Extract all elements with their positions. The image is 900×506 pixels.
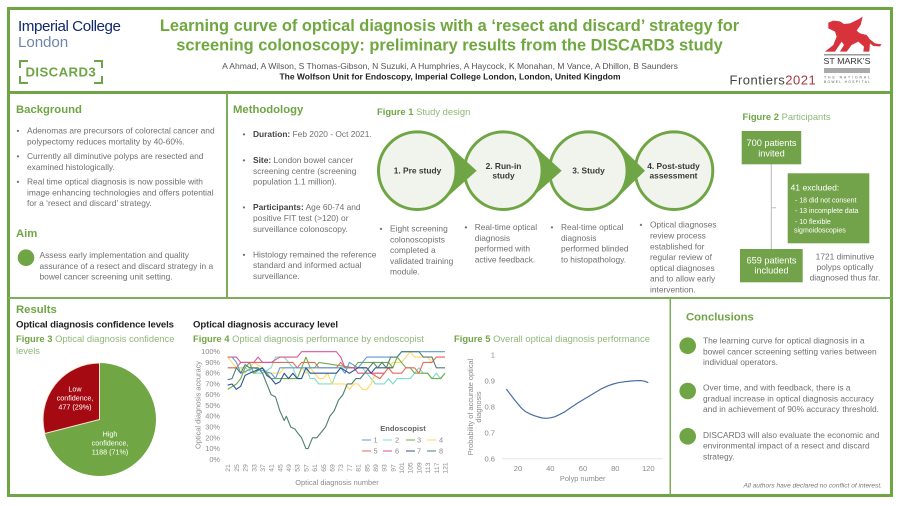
text block: step 4 notes: Optical diagnoses: [650, 220, 717, 230]
chart legend: Endoscopist: [380, 424, 426, 433]
text block: methodology bullets: Histology remained the reference: [253, 249, 377, 259]
heading: figure 2: Figure 2 Participants: [742, 111, 831, 122]
box: excluded: - 13 incomplete data: [795, 208, 859, 215]
flow diagram: four circles and arrows: 1. Pre study: [394, 166, 442, 176]
logo: Imperial College London: [18, 18, 121, 51]
heading: aim: Aim: [16, 228, 37, 240]
authors and affiliation: A Ahmad, A Wilson, S Thomas-Gibson, N Suzuki, A Humphries, A Haycock, K Monahan, M Vance, A Dhillon, B Saunders: [222, 61, 678, 71]
text block: step 2 notes: •: [464, 222, 468, 232]
line chart: 45: [277, 464, 284, 472]
flow diagram: four circles and arrows: 3. Study: [572, 166, 605, 176]
text block: step 4 notes: review process: [650, 230, 706, 240]
subheading: accuracy: Optical diagnosis accuracy level: [193, 320, 338, 330]
line chart: 49: [286, 464, 293, 472]
panel: aim: [16, 228, 213, 282]
conclusion 1: bowel cancer screening setting varies between: [703, 346, 877, 356]
box: included: 659 patients: [746, 256, 797, 266]
text block: step 3 notes: [550, 222, 629, 264]
line chart: 85: [364, 464, 371, 472]
conclusion 1: The learning curve for optical diagnosis in a: [703, 336, 865, 346]
line chart: 113: [425, 462, 432, 473]
text block: polyps diagnosed: polyps optically: [817, 262, 874, 272]
title: screening colonoscopy: preliminary results from the DISCARD3 study: [176, 36, 724, 54]
line chart: 30%: [205, 422, 220, 432]
text block: step 3 notes: performed blinded: [561, 244, 629, 254]
text block: step 4 notes: intervention.: [650, 284, 696, 294]
text block: step 3 notes: •: [550, 222, 554, 232]
chart legend: 8: [439, 446, 443, 456]
text block: step 1 notes: colonoscopists: [390, 234, 445, 244]
flow diagram: four circles and arrows: assessment: [650, 170, 698, 180]
chart legend: 3: [417, 436, 421, 444]
text block: step 1 notes: completed a: [390, 245, 436, 255]
disclaimer: All authors have declared no conflict of interest.: [742, 482, 882, 490]
line chart: 37: [260, 464, 267, 472]
line chart: 40%: [205, 412, 220, 421]
line chart: 1: [491, 350, 495, 360]
line chart: 109: [416, 462, 423, 474]
text block: background bullets: •: [16, 151, 20, 161]
line chart: 81: [356, 464, 363, 472]
line chart: 80%: [205, 369, 220, 378]
text block: background bullets: •: [16, 126, 20, 136]
panel: conclusions: [679, 312, 882, 490]
heading: figure 5: Figure 5 Overall optical diagnosis performance: [454, 333, 650, 344]
box: excluded: - 10 flexible: [795, 219, 831, 226]
line chart: 89: [373, 464, 380, 472]
text block: methodology bullets: •: [242, 129, 246, 139]
conclusion 3: strategy.: [703, 451, 734, 461]
chart legend: 7: [417, 446, 421, 456]
heading: results: Results: [16, 304, 57, 316]
text block: aim: assurance of a resect and discard strategy in a: [40, 261, 213, 271]
line chart: 70%: [205, 380, 220, 388]
line chart: 57: [303, 464, 310, 472]
text block: background bullets: •: [16, 176, 20, 186]
conclusion 2: gradual increase in optical diagnosis accuracy: [703, 393, 875, 403]
box: invited: invited: [758, 148, 785, 158]
text block: polyps diagnosed: diagnosed thus far.: [810, 272, 880, 282]
line chart: 105: [408, 462, 415, 474]
panel: background: [16, 104, 215, 208]
pie chart: confidence,: [57, 394, 93, 402]
logo: Imperial College London: Imperial College: [18, 18, 121, 35]
pie chart: confidence,: [92, 438, 128, 448]
chart legend: [362, 424, 443, 456]
conclusion 2: [679, 383, 879, 414]
connector: [771, 164, 776, 249]
text block: step 4 notes: established for: [650, 241, 705, 251]
icon: aim bullet: [18, 249, 34, 266]
chart legend: 6: [395, 446, 399, 456]
flow diagram: four circles and arrows: 2. Run-in: [486, 161, 521, 171]
authors and affiliation: [222, 61, 678, 82]
text block: step 3 notes: to histopathology.: [561, 254, 626, 264]
text block: methodology bullets: •: [242, 202, 246, 212]
box: invited: 700 patients: [746, 138, 797, 148]
text block: methodology bullets: surveillance.: [253, 271, 300, 281]
line chart: 25: [234, 464, 241, 472]
authors and affiliation: The Wolfson Unit for Endoscopy, Imperial College London, London, United Kingdom: [279, 72, 621, 82]
heading: figure 3: levels: [16, 345, 40, 356]
line chart: 50%: [205, 401, 220, 410]
line chart: 60: [579, 464, 587, 473]
text block: step 4 notes: •: [640, 220, 642, 230]
figure 3: confidence pie: [16, 333, 174, 476]
line chart: 0.7: [484, 428, 495, 438]
box: excluded: sigmoidoscopies: [794, 227, 846, 234]
heading: methodology: Methodology: [233, 104, 304, 116]
title: Learning curve of optical diagnosis with a ‘resect and discard’ strategy for: [160, 17, 740, 35]
pie chart: Low: [68, 384, 82, 394]
text block: step 1 notes: validated training: [390, 256, 454, 266]
text block: background bullets: for a ‘resect and discard’ strategy.: [27, 198, 152, 208]
logo: DISCARD3: [20, 61, 102, 83]
conclusion 1: [679, 336, 877, 367]
text block: methodology bullets: Site: London bowel cancer: [253, 155, 353, 165]
line chart: 40: [546, 464, 555, 473]
heading: background: Background: [16, 104, 82, 116]
conclusion 3: [679, 428, 880, 461]
box: included: included: [754, 266, 789, 276]
line chart: 90%: [205, 358, 220, 367]
line chart: 53: [295, 464, 302, 472]
line chart: Polyp number: [560, 474, 606, 483]
heading: figure 1: Figure 1 Study design: [377, 106, 470, 117]
line chart: 69: [330, 464, 336, 472]
text block: step 4 notes: regular review of: [650, 252, 713, 262]
line chart: 93: [382, 464, 389, 472]
text block: step 1 notes: Eight screening: [390, 224, 448, 234]
line chart: [466, 350, 663, 483]
text block: background bullets: Real time optical diagnosis is now possible with: [27, 176, 203, 186]
text block: step 3 notes: diagnosis: [561, 233, 596, 243]
text block: methodology bullets: population 1.1 million).: [253, 176, 337, 186]
line chart: Optical diagnosis accuracy: [194, 361, 202, 449]
line chart: [194, 347, 450, 487]
text block: step 4 notes: [640, 220, 717, 294]
line chart: 29: [243, 464, 250, 472]
line chart: 73: [338, 464, 345, 472]
pie chart: [43, 363, 156, 476]
text block: background bullets: [16, 126, 215, 208]
text block: background bullets: Adenomas are precursors of colorectal cancer and: [27, 126, 215, 136]
chart legend: 4: [439, 436, 443, 444]
logo: St Mark's winged lion: [824, 17, 882, 84]
flow diagram: four circles and arrows: study: [492, 170, 515, 180]
text block: polyps diagnosed: 1721 diminutive: [816, 252, 875, 262]
line chart: 41: [269, 464, 276, 472]
line chart: Optical diagnosis number: [295, 478, 379, 487]
line chart: 10%: [205, 444, 220, 453]
flow diagram: four circles and arrows: [378, 132, 713, 210]
text block: step 2 notes: Real-time optical: [475, 222, 537, 232]
line chart: 65: [321, 464, 328, 472]
logo: DISCARD3: DISCARD3: [26, 64, 96, 80]
line chart: 21: [225, 464, 232, 472]
text block: methodology bullets: surveillance colonoscopy.: [253, 224, 348, 234]
text block: background bullets: Currently all diminutive polyps are resected and: [27, 151, 204, 161]
text block: methodology bullets: [242, 129, 377, 281]
conclusion 3: environmental impact of a resect and discard: [703, 441, 870, 451]
heading: figure 4: Figure 4 Optical diagnosis performance by endoscopist: [193, 333, 424, 344]
text block: methodology bullets: positive FIT test (>120) or: [253, 213, 349, 223]
line chart: 61: [312, 464, 319, 472]
line chart: 20%: [205, 433, 220, 442]
text block: step 4 notes: optical diagnoses: [650, 263, 715, 273]
conclusion 2: and in achievement of 90% accuracy threshold.: [703, 404, 879, 414]
line chart: 101: [399, 462, 406, 474]
text block: methodology bullets: •: [242, 155, 246, 165]
text block: background bullets: image enhancing technologies and offers potential: [27, 187, 214, 197]
chart legend: 5: [374, 446, 378, 456]
conclusion 2: Over time, and with feedback, there is a: [703, 383, 851, 393]
line chart: 0.8: [484, 402, 495, 412]
logo: St Mark's winged lion: BOWEL HOSPITAL: [824, 80, 870, 84]
line chart: Probability of accurate optical: [466, 358, 475, 455]
text block: aim: bowel cancer screening unit setting.: [40, 272, 173, 282]
box: excluded: 41 excluded:: [790, 182, 839, 192]
box: excluded: - 18 did not consent: [795, 198, 857, 204]
line chart: 121: [442, 462, 450, 474]
text block: methodology bullets: Duration: Feb 2020 - Oct 2021.: [253, 129, 372, 139]
text block: step 3 notes: Real-time optical: [561, 222, 624, 232]
line chart: 20: [514, 464, 522, 473]
line chart: 77: [347, 464, 354, 472]
box: excluded: [788, 173, 869, 243]
text block: methodology bullets: screening centre (screening: [253, 166, 357, 176]
figure 2: participants: [740, 111, 880, 282]
box: invited: [742, 131, 801, 164]
line chart: 33: [251, 464, 258, 472]
pie chart: 477 (29%): [58, 402, 92, 412]
text block: step 4 notes: and to allow early: [650, 274, 716, 284]
conclusion 1: individual operators.: [703, 357, 778, 367]
text block: methodology bullets: Participants: Age 60-74 and: [253, 202, 361, 212]
chart legend: 1: [374, 436, 378, 444]
line chart: 0%: [209, 455, 220, 464]
line chart: 0.9: [484, 376, 495, 386]
text block: aim: [40, 250, 213, 282]
logo: St Mark's winged lion: THE NATIONAL: [824, 76, 870, 80]
chart legend: 2: [395, 436, 399, 444]
heading: figure 3: [16, 333, 174, 356]
line chart: diagnosis: [474, 391, 483, 423]
text block: methodology bullets: standard and informed actual: [253, 260, 362, 270]
pie chart: 1188 (71%): [92, 448, 128, 456]
conclusion 3: DISCARD3 will also evaluate the economic and: [703, 430, 880, 440]
text block: aim: Assess early implementation and quality: [40, 250, 190, 260]
text block: methodology bullets: •: [242, 249, 246, 259]
logo: St Mark's winged lion: ST MARK’S: [824, 56, 871, 66]
text block: step 2 notes: performed with: [475, 244, 530, 254]
text block: step 2 notes: [464, 222, 537, 264]
subheading: confidence: Optical diagnosis confidence levels: [16, 320, 174, 330]
heading: conclusions: Conclusions: [686, 312, 754, 324]
pie chart: High: [103, 430, 117, 438]
heading: figure 3: Figure 3 Optical diagnosis confidence: [16, 333, 174, 344]
text block: step 1 notes: •: [380, 224, 382, 234]
text block: step 2 notes: diagnosis: [475, 233, 510, 243]
flow diagram: four circles and arrows: 4. Post-study: [647, 161, 700, 171]
text block: step 1 notes: [380, 224, 454, 277]
panel: methodology: [233, 104, 377, 281]
text block: background bullets: examined histologically.: [27, 162, 115, 172]
line chart: 117: [434, 462, 441, 473]
logo: Imperial College London: London: [18, 34, 68, 51]
figure 4: performance by endoscopist: [193, 333, 450, 487]
line chart: 97: [390, 464, 397, 472]
text block: step 1 notes: module.: [390, 267, 420, 277]
line chart: 60%: [205, 390, 220, 399]
text block: step 2 notes: active feedback.: [475, 254, 535, 264]
text block: polyps diagnosed: [810, 252, 880, 282]
line chart: 0.6: [484, 454, 495, 464]
line chart: 80: [611, 464, 620, 473]
figure 1: study design: [377, 106, 717, 294]
panel: results: [16, 304, 663, 487]
figure 5: overall performance: [454, 333, 663, 483]
logo: Frontiers2021: Frontiers2021: [730, 72, 816, 88]
line chart: 120: [642, 464, 655, 473]
text block: background bullets: polypectomy reduces mortality by 40-60%.: [27, 136, 185, 146]
title: [160, 17, 740, 54]
line chart: 100%: [201, 347, 220, 356]
box: included: [740, 249, 803, 282]
